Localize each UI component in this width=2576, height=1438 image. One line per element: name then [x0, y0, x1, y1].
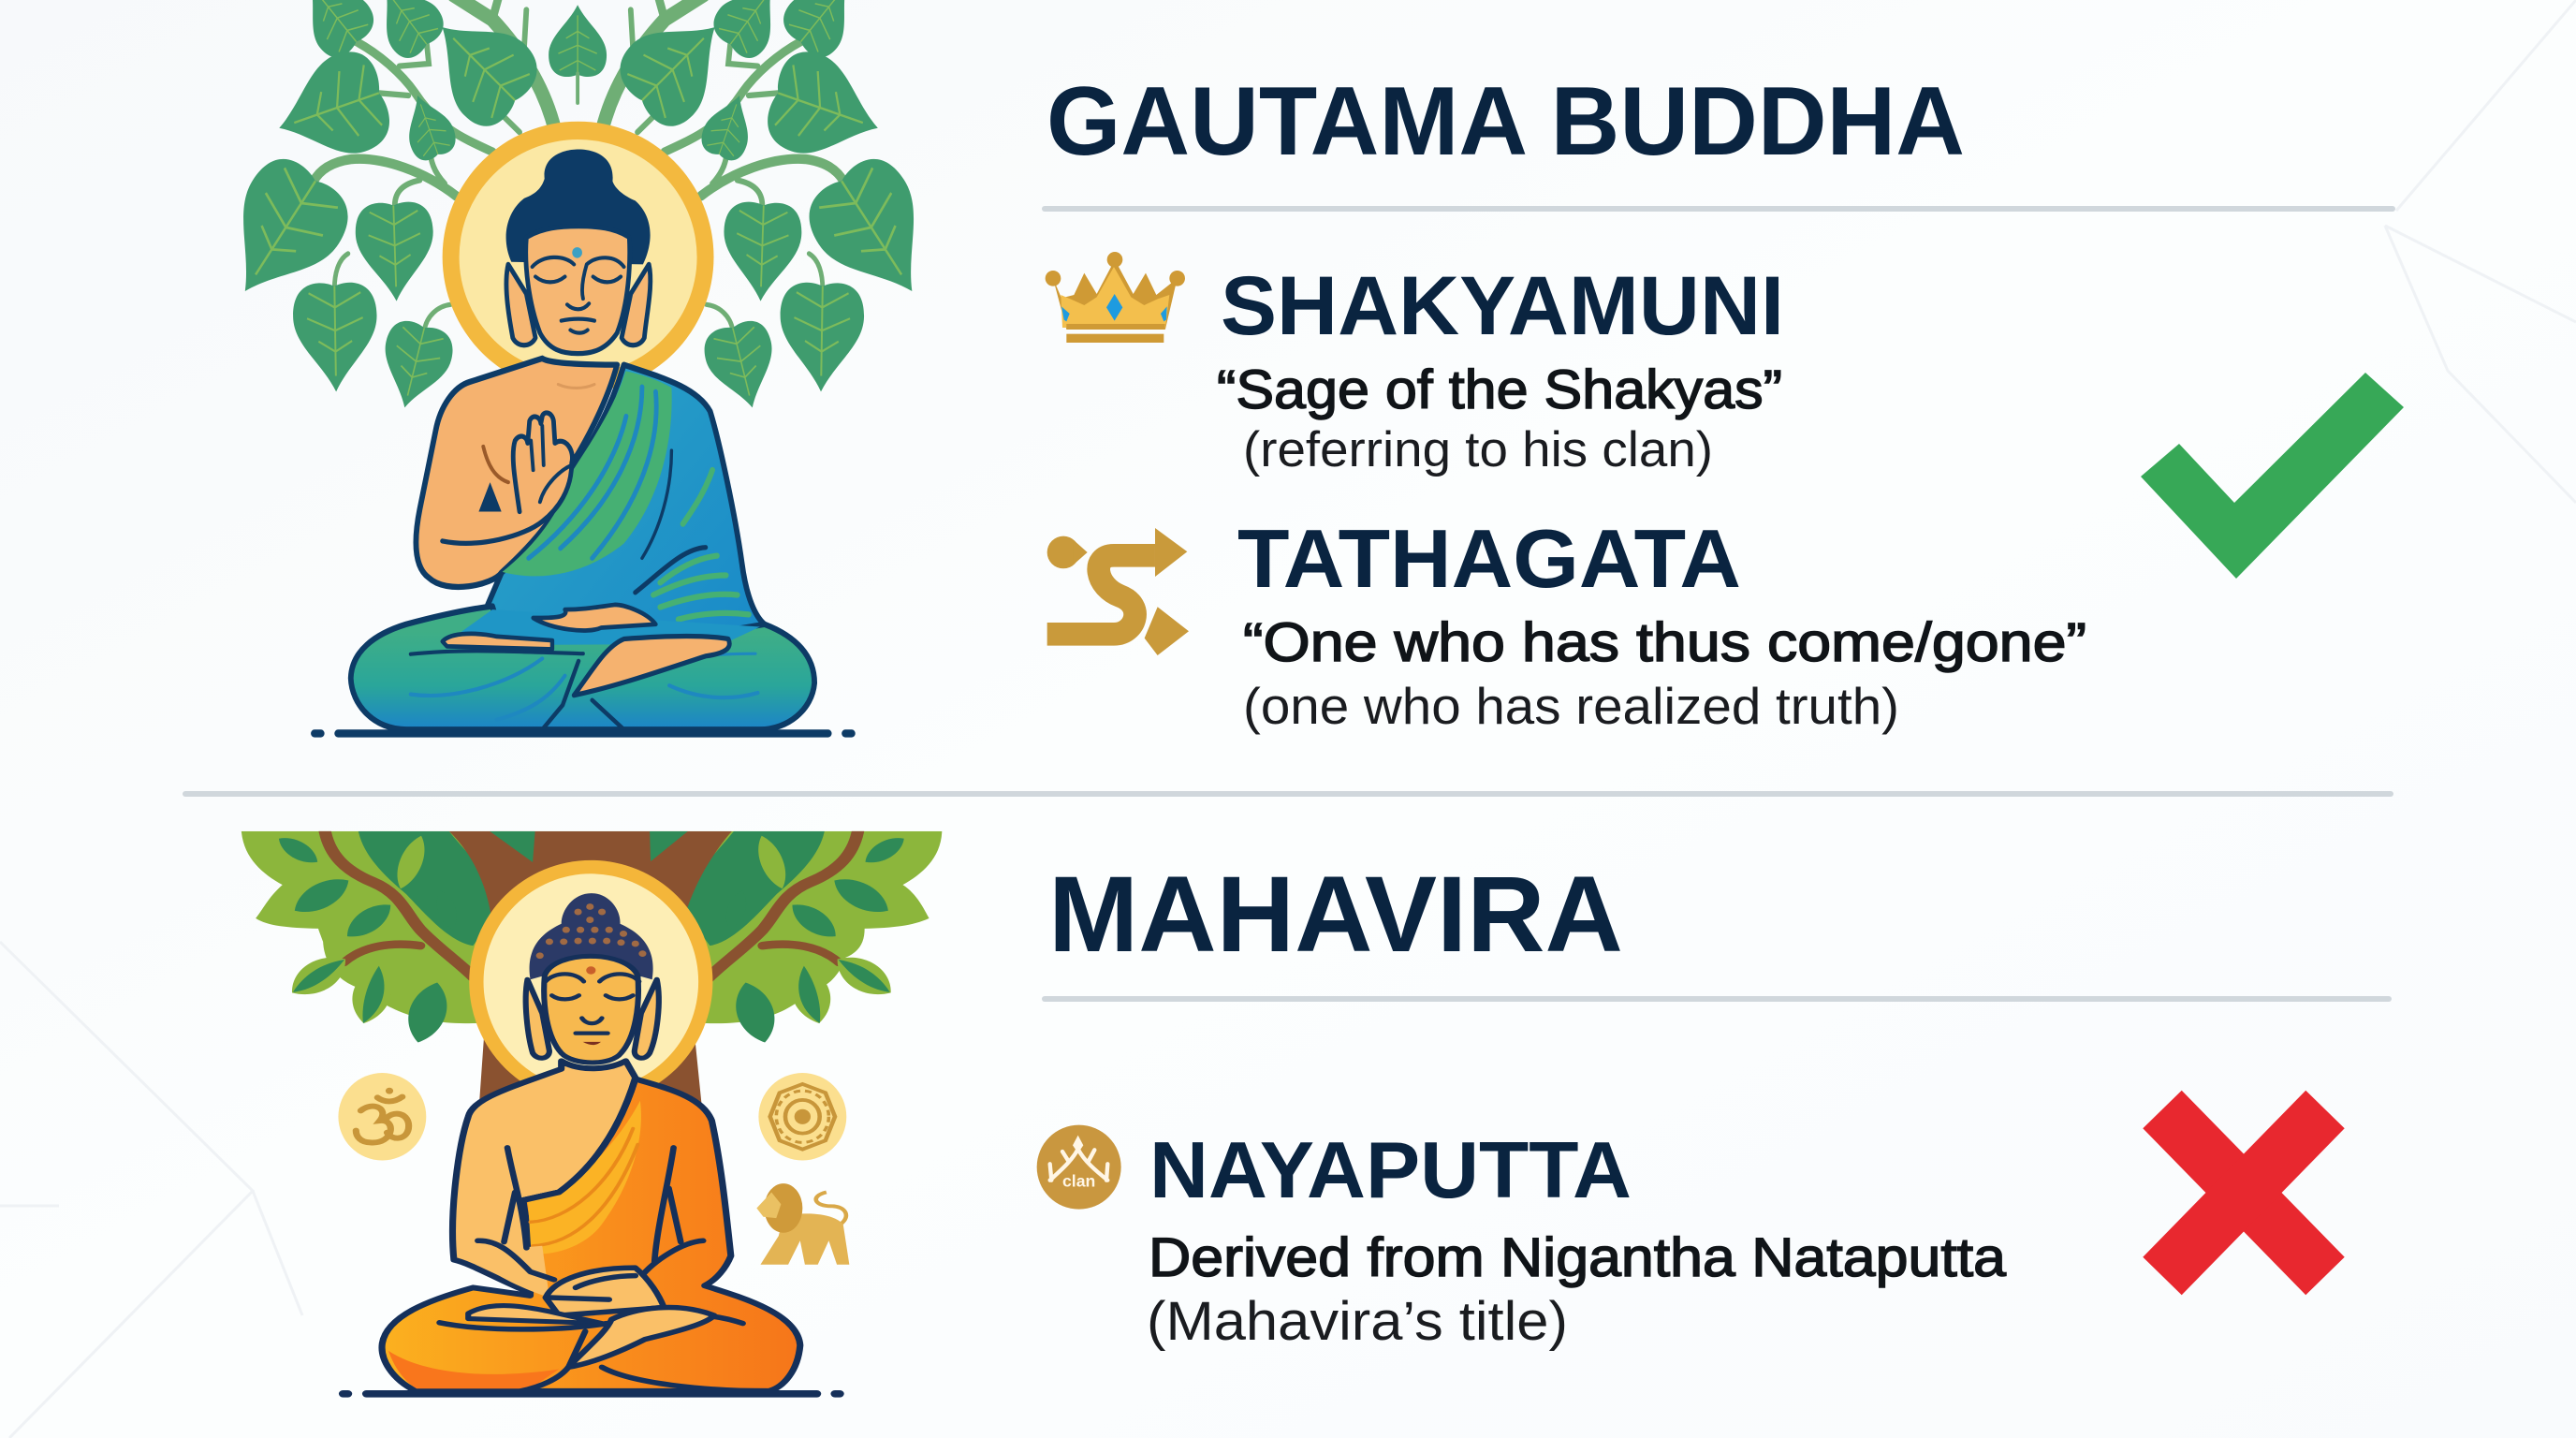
illustration: Mahavira under tree: [242, 831, 942, 1394]
symbol: dharma wheel coin: [758, 1073, 846, 1160]
symbol: golden lion: [756, 1183, 849, 1265]
note: one who has realized truth: (one who has realized truth): [1243, 677, 1899, 735]
entry: Shakyamuni: [1046, 252, 1784, 477]
name: Shakyamuni: SHAKYAMUNI: [1221, 258, 1784, 352]
meaning: One who has thus come/gone: “One who has thus come/gone”: [1243, 612, 2086, 673]
meaning: Derived from Nigantha Nataputta: Derived from Nigantha Nataputta: [1149, 1227, 2007, 1288]
heading: Gautama Buddha: GAUTAMA BUDDHA: [1046, 67, 1965, 176]
seated figure in orange robe: [382, 893, 800, 1391]
entry: Nayaputta: [1037, 1125, 2007, 1352]
bodhi tree branches and leaves: [202, 0, 955, 417]
tree canopy and trunk: [242, 831, 942, 1124]
illustration: Gautama Buddha under bodhi tree: [202, 0, 955, 733]
symbol: om coin: [338, 1073, 426, 1160]
halo: [443, 122, 714, 392]
panel: Mahavira: [242, 831, 2392, 1394]
halo: [469, 860, 712, 1104]
icon: winding path arrows: [1047, 528, 1189, 655]
entry: Tathagata: [1047, 512, 2086, 735]
seated figure in blue-green robe: [351, 150, 814, 729]
note: Mahavira's title: (Mahavira’s title): [1147, 1291, 1568, 1352]
ground line: [315, 726, 852, 741]
icon: red cross mark: [2162, 1109, 2325, 1276]
name: Nayaputta: NAYAPUTTA: [1149, 1126, 1632, 1215]
note: referring to his clan: (referring to his clan): [1243, 422, 1713, 477]
heading: Mahavira: MAHAVIRA: [1048, 855, 1623, 975]
icon: clan emblem: clan: [1062, 1171, 1095, 1190]
icon: green check mark: [2141, 373, 2404, 579]
ground line: [344, 1386, 840, 1402]
icon: gold crown: [1046, 252, 1185, 343]
panel: Gautama Buddha: [202, 0, 2404, 735]
icon: clan emblem: [1037, 1125, 1121, 1210]
meaning: Sage of the Shakyas: “Sage of the Shakyas”: [1217, 360, 1782, 420]
name: Tathagata: TATHAGATA: [1237, 512, 1741, 605]
